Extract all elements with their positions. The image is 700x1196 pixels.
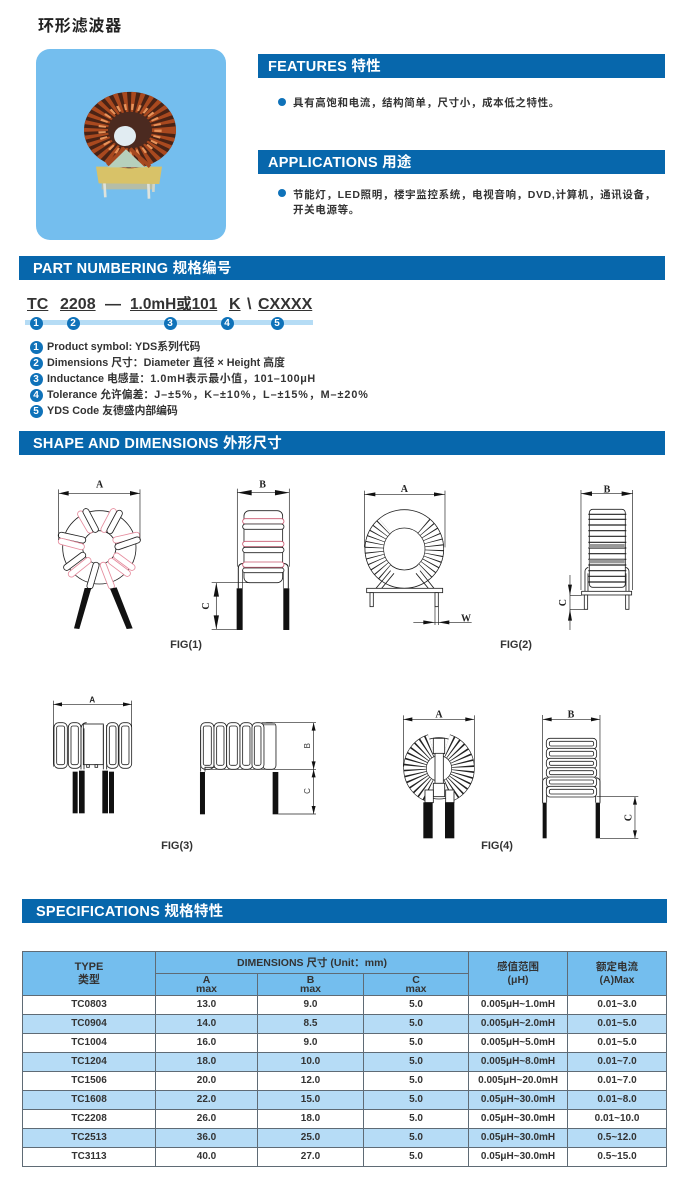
specifications table: 0.01~3.0 [597,999,637,1010]
specifications table: 5.0 [409,1151,423,1162]
specifications table: 5.0 [409,1132,423,1143]
legend marker 1 [30,340,42,354]
specifications table: B [307,974,314,986]
specifications table: 0.005μH~5.0mH [481,1037,555,1048]
specifications table: DIMENSIONS 尺寸 (Unit：mm) [237,956,387,968]
specifications table: 0.01~8.0 [597,1094,637,1105]
marker 2 [66,316,80,330]
figure 1: front view: A [96,480,104,491]
figure 4: side view: B [568,710,575,721]
legend text 2: Dimensions 尺寸：Diameter 直径 × Height 高度 [47,357,285,369]
figure 2 label: FIG(2) [500,639,532,651]
heading: features: FEATURES 特性 [268,59,381,75]
specifications table: (A)Max [600,974,635,986]
specifications table: 0.01~5.0 [597,1037,637,1048]
heading: specifications: SPECIFICATIONS 规格特性 [36,904,223,920]
specifications table: 0.005μH~8.0mH [481,1056,555,1067]
figure 4: side view [543,710,638,838]
specifications table: 0.05μH~30.0mH [481,1113,555,1124]
heading: features [258,54,665,78]
part number code: TC [27,296,48,313]
title: 环形滤波器 [38,18,122,35]
applications text: 开关电源等。 [293,204,360,216]
legend text 1: Product symbol: YDS系列代码 [47,341,200,353]
legend text 4: Tolerance 允许偏差：J–±5%，K–±10%，L–±15%，M–±20% [47,389,369,401]
specifications table: 26.0 [197,1113,216,1124]
marker 4: 4 [224,318,230,328]
figure 1: side view: C [201,602,212,610]
specifications table: TYPE [75,960,103,972]
specifications table: 8.5 [304,1018,317,1029]
features text: 具有高饱和电流，结构简单，尺寸小，成本低之特性。 [293,97,560,109]
heading: shape and dimensions: SHAPE AND DIMENSIONS 外形尺寸 [33,436,282,452]
marker 5 [270,316,284,330]
specifications table: 36.0 [197,1132,216,1143]
part number code: 1.0mH或101 [130,296,217,313]
specifications table: 40.0 [197,1151,216,1162]
specifications table: 5.0 [409,1018,423,1029]
applications text [293,189,656,216]
legend marker 4: 4 [33,390,39,400]
specifications table: TC0803 [71,999,107,1010]
specifications table: TC1204 [71,1056,107,1067]
figure 3: side view [200,723,316,814]
specifications table: TC2513 [71,1132,107,1143]
specifications table: TC0904 [71,1018,107,1029]
figure 3: front view [53,696,132,813]
heading: applications: APPLICATIONS 用途 [268,155,412,171]
marker 4 [220,316,234,330]
specifications table: 27.0 [301,1151,320,1162]
figure 2: front view: W [461,613,471,624]
specifications table: 10.0 [301,1056,320,1067]
specifications table: 类型 [78,974,100,986]
specifications table: 0.005μH~2.0mH [481,1018,555,1029]
specifications table: 12.0 [301,1075,320,1086]
legend marker 5: 5 [33,406,39,416]
figure 2: front view: A [401,484,409,495]
specifications table: 感值范围 [497,960,539,972]
legend marker 3: 3 [33,374,39,384]
specifications table: 15.0 [301,1094,320,1105]
specifications table: max [406,982,427,994]
specifications table: 25.0 [301,1132,320,1143]
part number code: — [105,296,121,313]
specifications table: (μH) [508,974,529,986]
marker 3: 3 [167,318,173,328]
marker 1 [30,316,42,330]
specifications table: C [412,974,420,986]
specifications table: 0.05μH~30.0mH [481,1151,555,1162]
legend marker 5 [30,404,42,418]
specifications table: 0.05μH~30.0mH [481,1132,555,1143]
part number code: CXXXX [258,296,312,313]
specifications table: 0.01~10.0 [595,1113,639,1124]
figure 4: side view: C [624,814,635,821]
figure 3: side view: C [303,788,312,794]
legend text 5: YDS Code 友德盛内部编码 [47,405,178,417]
specifications table: 0.005μH~1.0mH [481,999,555,1010]
figure 4: front view: A [435,710,443,721]
heading: specifications [22,899,667,923]
specifications table: 0.01~7.0 [597,1075,637,1086]
specifications table: 5.0 [409,1037,423,1048]
legend marker 2 [30,356,42,370]
features bullet [278,98,286,106]
part number underline band [25,320,313,325]
legend marker 1: 1 [33,342,39,352]
figure 4: front view [403,710,474,838]
specifications table: max [196,982,217,994]
figure 1: side view [201,480,289,630]
heading: applications [258,150,665,174]
specifications table: 22.0 [197,1094,216,1105]
marker 5: 5 [274,318,280,328]
figure 2: side view: C [558,599,569,606]
specifications table: 18.0 [301,1113,320,1124]
specifications table: 0.005μH~20.0mH [478,1075,558,1086]
specifications table: 额定电流 [596,960,638,972]
specifications table: TC1608 [71,1094,107,1105]
specifications table: TC3113 [71,1151,107,1162]
part number code: 2208 [60,296,96,313]
specifications table: 5.0 [409,1056,423,1067]
specifications table: 9.0 [304,1037,317,1048]
specifications table: 9.0 [304,999,317,1010]
specifications table: TC1004 [71,1037,107,1048]
figure 3 label: FIG(3) [161,840,193,852]
specifications table: 0.01~7.0 [597,1056,637,1067]
specifications table [22,951,667,1167]
part number code [27,296,312,313]
heading: part numbering: PART NUMBERING 规格编号 [33,261,232,277]
specifications table: 5.0 [409,1113,423,1124]
specifications table: A [203,974,210,986]
specifications table: 5.0 [409,1075,423,1086]
specifications table: 20.0 [197,1075,216,1086]
figure 2: side view: B [604,484,611,495]
specifications table: TC1506 [71,1075,107,1086]
figure 1: side view: B [259,480,266,491]
figure 2: side view [558,484,633,630]
specifications table: 16.0 [197,1037,216,1048]
applications bullet [278,189,286,197]
legend text 3: Inductance 电感量：1.0mH表示最小值，101–100μH [47,373,316,385]
specifications table: 0.05μH~30.0mH [481,1094,555,1105]
figure 3: side view: B [303,743,312,748]
legend marker 3 [30,372,42,386]
specifications table: 0.01~5.0 [597,1018,637,1029]
heading: part numbering [19,256,665,280]
figure 1 label: FIG(1) [170,639,202,651]
legend marker 4 [30,388,42,402]
specifications table: TC2208 [71,1113,107,1124]
specifications table: 18.0 [197,1056,216,1067]
figure 3: front view: A [89,696,95,705]
specifications table: max [300,982,321,994]
figure 4 label: FIG(4) [481,840,513,852]
specifications table: 0.5~12.0 [597,1132,637,1143]
specifications table: 0.5~15.0 [597,1151,637,1162]
specifications table: 14.0 [197,1018,216,1029]
specifications table: 13.0 [197,999,216,1010]
product photo panel [36,49,226,240]
marker 2: 2 [70,318,76,328]
applications text: 节能灯，LED照明，楼宇监控系统，电视音响，DVD,计算机，通讯设备， [293,189,656,201]
part number code: \ [247,296,251,313]
legend marker 2: 2 [33,358,39,368]
photo: toroidal filter coil [96,102,164,199]
part number code: K [229,296,241,313]
figure 2: front view [364,484,472,625]
marker 1: 1 [33,318,39,328]
specifications table: 5.0 [409,999,423,1010]
specifications table: 5.0 [409,1094,423,1105]
figure 1: front view [59,480,140,629]
marker 3 [164,316,176,330]
heading: shape and dimensions [19,431,665,455]
